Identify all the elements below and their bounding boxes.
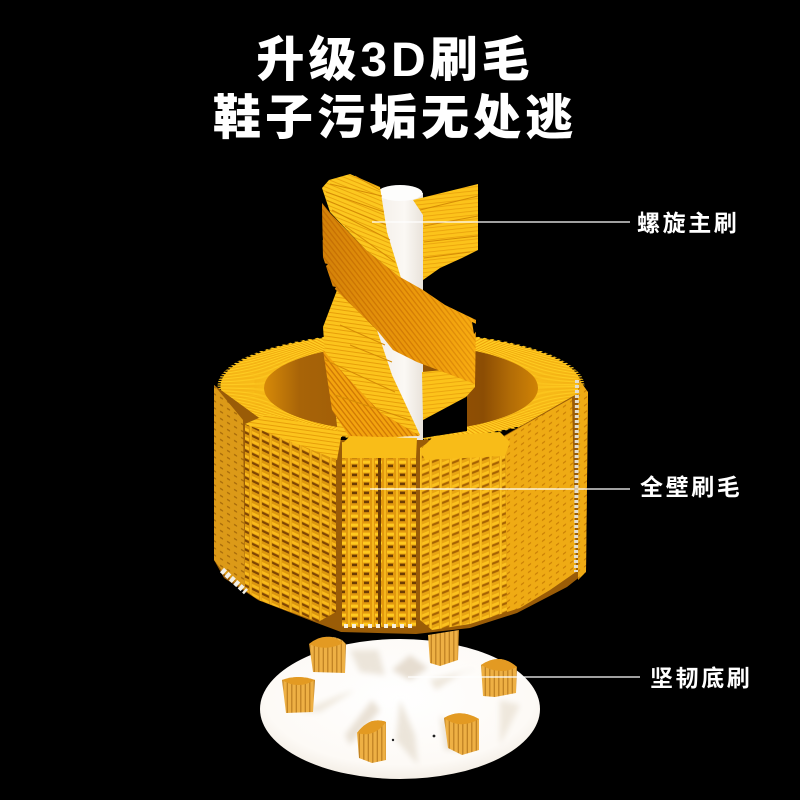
label: tough bottom brush: 坚韧底刷 xyxy=(650,665,752,691)
glass edge left xyxy=(222,570,246,592)
label: full wall bristles: 全壁刷毛 xyxy=(640,474,742,500)
fin bristle lines xyxy=(325,176,478,420)
wall: far left xyxy=(214,385,245,590)
spiral upper left fin xyxy=(322,174,401,278)
spiral main brush xyxy=(316,174,481,440)
wall: silhouette base xyxy=(214,385,588,634)
glass edge right xyxy=(576,380,577,572)
bottom bristle tufts xyxy=(282,630,517,763)
ring of bristles, top rim xyxy=(218,332,584,440)
spiral lower shadow xyxy=(323,350,420,438)
ring inner wall xyxy=(264,344,538,432)
bottom rim dots xyxy=(344,624,414,628)
title xyxy=(213,34,577,145)
spiral lower right fin xyxy=(422,367,475,420)
base brush disc xyxy=(260,639,540,779)
wall top fringes xyxy=(245,414,342,460)
spiral lower left fin xyxy=(323,290,420,440)
label: spiral main brush: 螺旋主刷 xyxy=(637,210,739,236)
wall: edge right xyxy=(578,378,588,580)
main rod xyxy=(377,185,423,440)
full wall bristles xyxy=(214,378,588,634)
wall: right xyxy=(420,440,507,630)
leader lines xyxy=(370,222,640,677)
wall: far right xyxy=(505,398,576,612)
gap behind rod xyxy=(423,395,467,438)
spiral orange band xyxy=(316,203,481,384)
wall: centre xyxy=(342,442,416,627)
title: 升级3D刷毛 xyxy=(256,34,534,87)
wall: left xyxy=(245,420,336,622)
disc spokes xyxy=(300,650,520,765)
spiral upper right fin xyxy=(413,184,478,280)
title: 鞋子污垢无处逃 xyxy=(213,92,577,145)
